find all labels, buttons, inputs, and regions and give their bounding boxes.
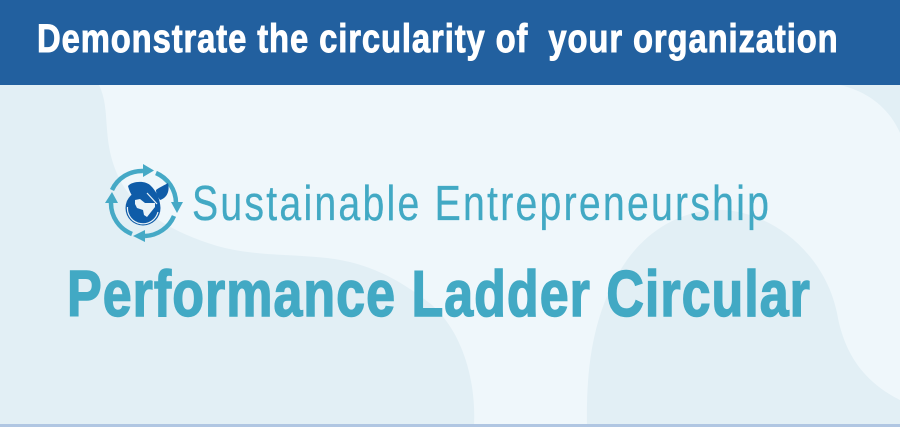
bottom edge	[0, 424, 900, 427]
logo wordmark: Sustainable Entrepreneurship	[192, 176, 771, 230]
header band	[0, 0, 900, 85]
icon: circular arrows	[105, 164, 183, 242]
header title: Demonstrate the circularity of your organization	[37, 17, 839, 61]
main heading: Performance Ladder Circular	[67, 257, 811, 330]
icon: globe and leaf	[126, 182, 169, 226]
logo icon: circular arrows around globe and leaf	[105, 164, 183, 242]
